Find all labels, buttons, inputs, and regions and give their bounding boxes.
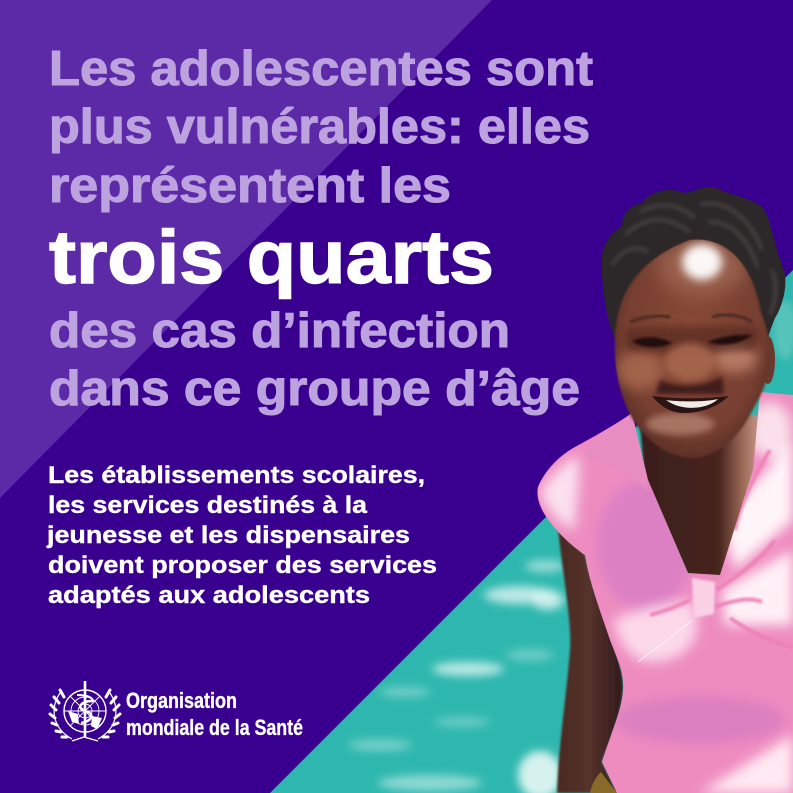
wordmark: mondiale de la Santé [126,715,303,740]
girl: cheek highlights [616,350,664,390]
girl: collar [617,418,646,486]
girl: eyes [632,337,672,347]
girl: left arm [557,528,623,793]
light purple diagonal panel [0,0,492,498]
headline: dans ce groupe d’âge [49,362,580,416]
girl: forehead highlight [657,236,747,296]
wordmark [126,688,303,740]
body text: doivent proposer des services [48,552,437,579]
girl: shirt knot [692,578,715,618]
girl: pink shirt [530,385,793,793]
body text: Les établissements scolaires, [48,462,425,489]
body text: adaptés aux adolescents [48,582,370,609]
girl: face [615,240,770,458]
girl: ear [761,336,775,384]
headline: représentent les [49,159,451,213]
icon: WHO emblem [50,681,120,741]
girl: skirt [590,772,617,793]
wordmark: Organisation [126,688,237,713]
headline: plus vulnérables: elles [49,100,590,154]
headline emphasis: trois quarts [49,215,494,299]
body text [46,462,437,609]
girl: mouth and teeth [652,396,729,413]
teal water panel [260,260,793,793]
headline [49,42,593,416]
WHO logo [50,681,303,741]
photo: smiling girl in pink shirt [530,187,793,793]
headline: Les adolescentes sont [49,42,593,96]
body text: les services destinés à la [48,492,368,519]
girl: nose [665,343,715,381]
girl: neck and chest [640,415,760,577]
body text: jeunesse et les dispensaires [46,522,410,549]
girl: hair [602,187,785,352]
headline: des cas d’infection [49,304,510,358]
girl: eye shadow band [625,326,758,353]
